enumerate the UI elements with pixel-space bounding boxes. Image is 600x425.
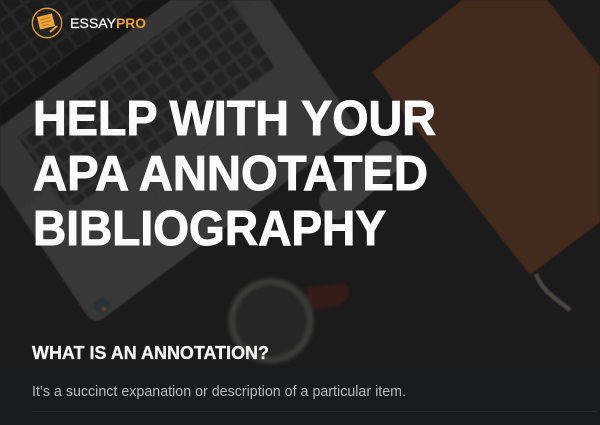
section heading: WHAT IS AN ANNOTATION? [32, 343, 269, 363]
laptop hinge [0, 0, 171, 126]
footer band [0, 370, 600, 425]
laptop body [0, 0, 358, 321]
mouse [314, 136, 408, 225]
section body text: It’s a succinct expanation or description of a particular item. [32, 384, 406, 400]
mug handle [306, 283, 349, 310]
logo wordmark: ESSAY [70, 16, 116, 31]
laptop trackpad [150, 128, 274, 247]
mug coffee [235, 285, 307, 357]
notebook ribbon [536, 274, 570, 310]
title: HELP WITH YOUR [33, 92, 436, 146]
laptop keyboard [17, 0, 275, 205]
logo ring [32, 8, 62, 38]
title: APA ANNOTATED [33, 147, 428, 201]
logo [32, 8, 146, 38]
mug rim [228, 278, 314, 364]
logo note icon [37, 14, 57, 32]
laptop photo [0, 0, 358, 321]
laptop sticker [94, 298, 110, 314]
coffee mug [228, 278, 349, 364]
title: BIBLIOGRAPHY [33, 202, 386, 256]
title [33, 92, 436, 256]
laptop screen [0, 0, 171, 125]
logo: PRO [116, 16, 146, 31]
notebook [372, 0, 600, 310]
